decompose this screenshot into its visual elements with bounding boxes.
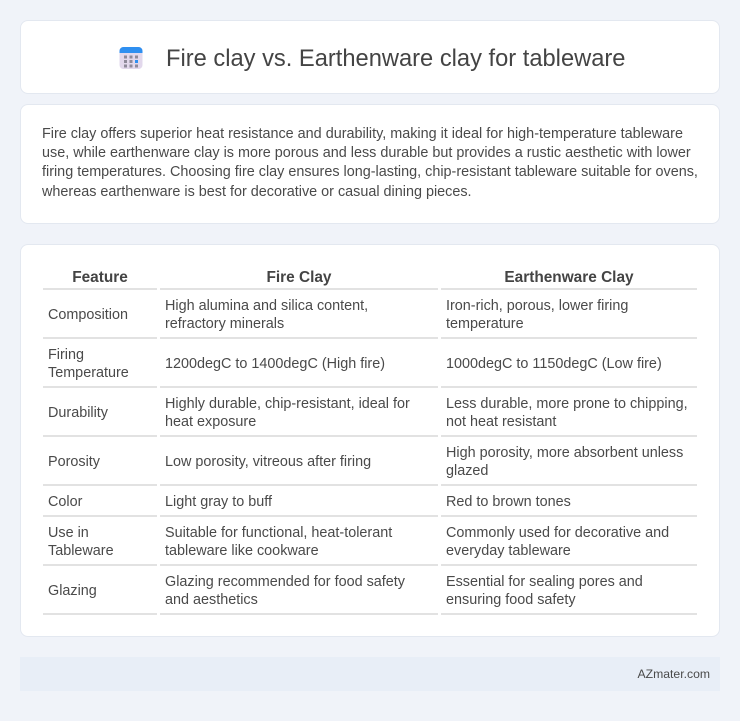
cell: Less durable, more prone to chipping, [446, 396, 688, 412]
header: Earthenware Clay: Earthenware Clay [504, 269, 634, 286]
row: Firing Temperature: Firing [48, 347, 84, 363]
row: Glazing: Glazing [48, 583, 97, 599]
cell: Light gray to buff [165, 494, 272, 510]
row: Use in Tableware [48, 525, 114, 559]
cell: 1200degC to 1400degC (High fire) [165, 356, 385, 372]
summary card [20, 104, 720, 224]
cell: and aesthetics [165, 592, 258, 608]
cell: Glazing recommended for food safety [165, 574, 405, 590]
cell: everyday tableware [446, 543, 571, 559]
cell: glazed [446, 463, 488, 479]
row: Porosity: Porosity [48, 454, 100, 470]
cell: tableware like cookware [165, 543, 319, 559]
row: Color: Color [48, 494, 82, 510]
footer bar [20, 657, 720, 691]
cell [446, 396, 688, 430]
cell: Highly durable, chip-resistant, ideal for [165, 396, 410, 412]
row: Composition: Composition [48, 307, 128, 323]
cell: not heat resistant [446, 414, 556, 430]
summary text: use, while earthenware clay is more porous and less durable but provides a rustic aesthetic with lower [42, 145, 691, 161]
icon: calendar [120, 47, 142, 69]
header: Feature: Feature [72, 269, 128, 286]
cell: Red to brown tones [446, 494, 571, 510]
row: Use in Tableware: Use in [48, 525, 89, 541]
cell [446, 445, 683, 479]
cell: ensuring food safety [446, 592, 576, 608]
footer text: AZmater.com [638, 667, 710, 681]
table card [20, 244, 720, 637]
cell [165, 298, 368, 332]
title: Fire clay vs. Earthenware clay for tableware [166, 46, 625, 72]
cell: High alumina and silica content, [165, 298, 368, 314]
cell [165, 525, 392, 559]
cell: Iron-rich, porous, lower firing [446, 298, 628, 314]
summary text: firing temperatures. Choosing fire clay ensures long-lasting, chip-resistant tableware suitable for ovens, [42, 164, 698, 180]
summary text: Fire clay offers superior heat resistance and durability, making it ideal for high-temperature tableware [42, 126, 683, 142]
cell: 1000degC to 1150degC (Low fire) [446, 356, 662, 372]
cell [446, 298, 628, 332]
summary text: whereas earthenware is best for decorative or casual dining pieces. [42, 184, 472, 200]
cell: temperature [446, 316, 524, 332]
cell [165, 574, 405, 608]
cell [446, 525, 669, 559]
cell: Essential for sealing pores and [446, 574, 643, 590]
cell: Suitable for functional, heat-tolerant [165, 525, 392, 541]
row: Use in Tableware: Tableware [48, 543, 114, 559]
cell [165, 396, 410, 430]
row: Durability: Durability [48, 405, 108, 421]
header: Fire Clay: Fire Clay [266, 269, 332, 286]
summary text [42, 126, 698, 200]
cell: Low porosity, vitreous after firing [165, 454, 371, 470]
comparison table [43, 269, 697, 615]
cell: refractory minerals [165, 316, 284, 332]
title card [20, 20, 720, 94]
cell: heat exposure [165, 414, 256, 430]
row: Firing Temperature [48, 347, 129, 381]
cell: High porosity, more absorbent unless [446, 445, 683, 461]
cell: Commonly used for decorative and [446, 525, 669, 541]
row: Firing Temperature: Temperature [48, 365, 129, 381]
cell [446, 574, 643, 608]
